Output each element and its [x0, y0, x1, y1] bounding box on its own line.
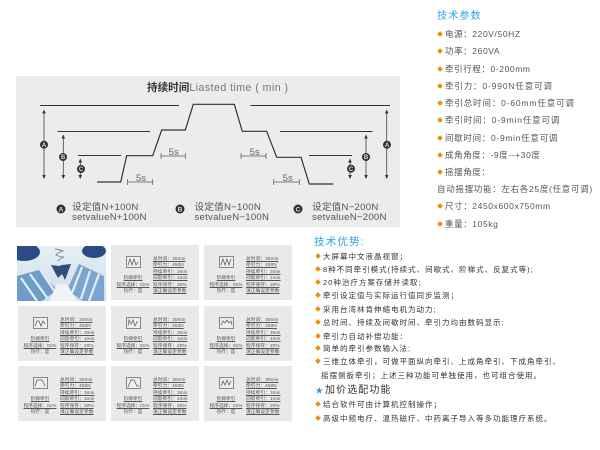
labels: 总时间：30min	[153, 256, 185, 261]
labels: 阶梯牵引	[31, 396, 49, 401]
advantage 2: 8种不同牵引模式(持续式、间歇式、阶梯式、反复式等);	[323, 265, 534, 274]
labels: 牵引力：450N	[60, 323, 91, 328]
labels: 请正确设定参数	[153, 409, 187, 414]
chart: traction force steps: 5s	[250, 147, 260, 158]
chart title: 持续时间Liasted time ( min )	[147, 82, 288, 94]
advantage 7	[315, 330, 595, 343]
spec: swing angle: 摇摆角度：	[445, 167, 491, 177]
labels: 请正确设定参数	[246, 288, 280, 293]
labels: 持续牵引：3min	[60, 390, 94, 395]
legend A: 设定值N+100N	[72, 202, 138, 213]
spec: angle: 成角角度：-9度--+30度	[445, 150, 541, 160]
labels: 程序保存：20%	[246, 403, 280, 408]
labels	[116, 256, 188, 294]
legend A	[72, 202, 147, 223]
icon: waveform	[33, 377, 48, 389]
labels	[210, 316, 280, 355]
card: mode 2	[204, 245, 292, 300]
chart: traction force steps	[40, 104, 391, 214]
spec: auto swing: 自动摇摆功能：左右各25度(任意可调)	[437, 184, 593, 194]
labels: 总时间：30min	[246, 256, 278, 261]
chart: traction force steps: 5s	[283, 173, 293, 184]
labels: 程序保存：20%	[60, 343, 94, 348]
labels: 热疗：是	[124, 349, 142, 354]
icon: waveform	[219, 256, 234, 268]
chart: traction force steps: C	[349, 167, 354, 173]
labels: 牵引力：450N	[153, 323, 184, 328]
chart: traction force steps: B	[364, 155, 369, 161]
labels: 程序保存：20%	[153, 343, 187, 348]
labels: 程序选择：01%	[117, 343, 149, 348]
labels: 持续牵引：3min	[153, 330, 188, 335]
chart: traction force steps: 5s	[136, 173, 146, 184]
labels: 阶梯牵引	[217, 275, 235, 280]
labels: 请正确设定参数	[246, 349, 280, 354]
card: mode 6	[18, 366, 106, 421]
chart: traction force steps: A	[385, 143, 390, 149]
labels: 请正确设定参数	[60, 349, 94, 354]
advantage 8	[315, 342, 595, 355]
labels: 程序选择：01%	[210, 343, 242, 348]
card: mode 8	[204, 366, 292, 421]
labels: 热疗：是	[217, 409, 235, 414]
advantage 3: 20种治疗方案存储并读取;	[323, 278, 421, 287]
labels: 阶梯牵引	[124, 275, 142, 280]
icon: waveform	[126, 377, 141, 389]
labels: 程序保存：20%	[60, 403, 94, 408]
spec: interval time: 间歇时间：0-9min任意可调	[445, 133, 558, 143]
labels: 牵引力：450N	[153, 383, 184, 388]
legend C	[312, 202, 387, 223]
labels: 间歇牵引：1min	[60, 396, 94, 401]
advantage 9 continued: 摇摆侧扳牵引；上述三种功能可单独使用，也可组合使用。	[321, 371, 542, 380]
labels: 总时间：30min	[153, 377, 185, 382]
legend B: 设定值N−100N	[194, 202, 261, 213]
labels: 持续牵引：3min	[246, 330, 280, 335]
legend B	[194, 202, 269, 223]
chart: traction force steps: B	[178, 206, 183, 214]
option 1	[315, 398, 595, 411]
spec: weight: 重量：105kg	[445, 219, 498, 229]
spec: wattage: 功率：260VA	[445, 46, 500, 56]
legend C: 设定值N−200N	[312, 202, 378, 213]
advantage 8: 简单的牵引参数输入法;	[323, 344, 411, 353]
labels: 程序选择：01%	[210, 403, 242, 408]
card: mode 1	[111, 245, 199, 300]
spec: total time: 牵引总时间：0-60mm任意可调	[445, 98, 575, 108]
legend B: setvalueN−100N	[194, 212, 269, 223]
spec list	[437, 29, 593, 229]
chart: traction force steps: C	[296, 206, 301, 214]
labels: 持续牵引：3min	[246, 390, 280, 395]
spec: size: 尺寸：2450x600x750mm	[445, 201, 551, 211]
icon: waveform	[219, 377, 234, 389]
labels: 程序保存：20%	[246, 282, 280, 287]
labels: 总时间：30min	[246, 317, 278, 322]
labels	[210, 376, 280, 415]
labels: 程序选择：01%	[210, 282, 242, 287]
labels: 请正确设定参数	[153, 288, 187, 293]
chart: traction force steps: C	[79, 167, 84, 173]
icon: waveform	[126, 317, 141, 329]
labels	[24, 316, 94, 355]
labels	[116, 316, 188, 355]
icon: waveform	[33, 317, 48, 329]
legend C: setvalueN−200N	[312, 212, 387, 223]
labels: 牵引力：450N	[153, 262, 184, 267]
labels: 持续牵引：3min	[153, 390, 188, 395]
card: mode 7	[111, 366, 199, 421]
labels: 请正确设定参数	[153, 349, 187, 354]
labels: 热疗：是	[217, 349, 235, 354]
labels: 间歇牵引：1min	[246, 336, 280, 341]
heading: technical parameters: 技术参数	[437, 11, 482, 22]
labels: 间歇牵引：1min	[246, 275, 280, 280]
labels: 请正确设定参数	[60, 409, 94, 414]
labels: 总时间：30min	[153, 317, 185, 322]
labels: 持续牵引：3min	[153, 269, 188, 274]
icon: waveform	[126, 256, 141, 268]
card: mode 3	[18, 306, 106, 361]
labels: 牵引力：450N	[246, 383, 277, 388]
labels: 间歇牵引：1min	[246, 396, 280, 401]
labels: 阶梯牵引	[124, 396, 142, 401]
chart: traction force steps: A	[59, 206, 64, 214]
labels: 间歇牵引：1min	[153, 275, 188, 280]
spec: power: 电源：220V/50HZ	[445, 29, 521, 39]
labels: 阶梯牵引	[217, 396, 235, 401]
labels: 间歇牵引：1min	[60, 336, 94, 341]
advantage 5: 采用台湾林肯伸缩电机为动力;	[323, 305, 437, 314]
labels: 持续牵引：3min	[246, 269, 280, 274]
labels: 总时间：30min	[60, 317, 92, 322]
advantage 9	[315, 355, 595, 368]
labels: 程序保存：20%	[153, 282, 187, 287]
labels: 牵引力：450N	[60, 383, 91, 388]
labels: 牵引力：450N	[246, 323, 277, 328]
spec: traction time: 牵引时间：0-9min任意可调	[445, 115, 560, 125]
labels: 总时间：30min	[246, 377, 278, 382]
heading: technical advantages: 技术优势:	[314, 236, 365, 248]
labels: 热疗：是	[124, 288, 142, 293]
labels: 牵引力：450N	[246, 262, 277, 267]
labels	[24, 376, 94, 415]
heading: optional functions: 加价选配功能	[325, 385, 392, 396]
card: mode 4	[111, 306, 199, 361]
labels: 热疗：是	[31, 349, 49, 354]
labels: 热疗：是	[31, 409, 49, 414]
labels: 持续牵引：3min	[60, 330, 94, 335]
spec: stroke: 牵引行程：0-200mm	[445, 64, 531, 74]
advantage 9: 三维立体牵引，可做平面纵向牵引、上成角牵引、下成角牵引、	[323, 357, 561, 366]
icon: star: ★	[316, 386, 323, 394]
labels	[116, 376, 188, 415]
card: mode 5	[204, 306, 292, 361]
labels: 请正确设定参数	[246, 409, 280, 414]
option 1: 结合软件可由计算机控制操作；	[323, 400, 442, 409]
labels: 程序选择：01%	[24, 343, 56, 348]
chart: traction force steps: A	[42, 143, 47, 149]
chart: traction force steps: B	[61, 155, 66, 161]
labels: 程序保存：20%	[153, 403, 187, 408]
labels: 阶梯牵引	[124, 336, 142, 341]
labels: 程序选择：01%	[117, 403, 149, 408]
labels: 程序保存：20%	[246, 343, 280, 348]
labels: 总时间：30min	[60, 377, 92, 382]
advantage 6: 总时间、持续及间歇时间、牵引力均由数码显示;	[323, 318, 505, 327]
option 2	[315, 412, 595, 425]
labels: 间歇牵引：1min	[153, 336, 188, 341]
labels: 阶梯牵引	[31, 336, 49, 341]
image: gears	[17, 246, 106, 301]
labels: 阶梯牵引	[217, 336, 235, 341]
labels: 间歇牵引：1min	[153, 396, 188, 401]
advantage 1: 大屏幕中文液晶视窗；	[323, 252, 408, 261]
labels	[210, 256, 280, 294]
chart: traction force steps: 5s	[169, 147, 179, 158]
spec: force: 牵引力：0-990N任意可调	[445, 81, 553, 91]
labels: 程序选择：01%	[117, 282, 149, 287]
advantage 7: 牵引力自动补偿功能：	[323, 332, 408, 341]
option 2: 高级中频电疗、温热磁疗、中药离子导入等多功能理疗系统。	[323, 414, 552, 423]
icon: waveform	[219, 317, 234, 329]
legend A: setvalueN+100N	[72, 212, 147, 223]
panel: traction time chart	[16, 76, 400, 227]
labels: 热疗：是	[124, 409, 142, 414]
labels: 热疗：是	[217, 288, 235, 293]
labels: 程序选择：01%	[24, 403, 56, 408]
advantage 4: 牵引设定值与实际运行值同步监测；	[323, 291, 459, 300]
